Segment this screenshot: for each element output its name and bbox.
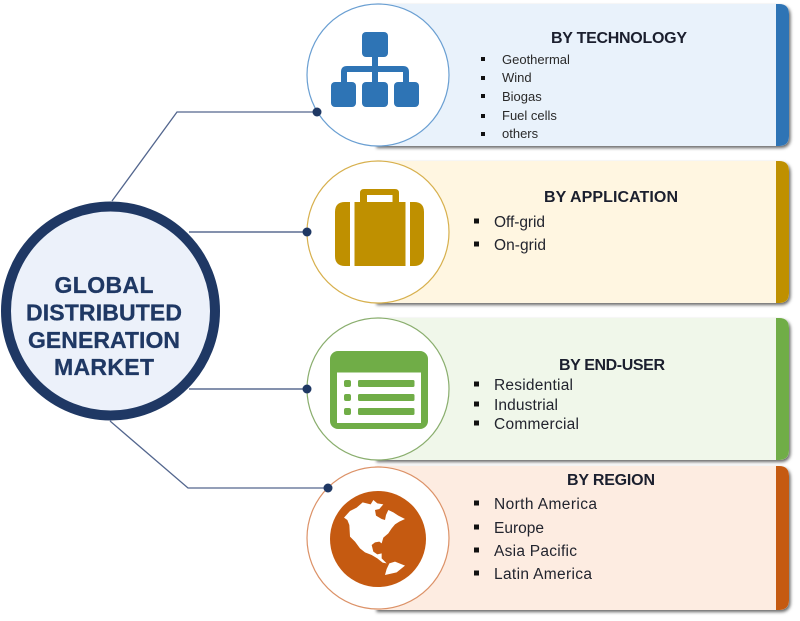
icon: briefcase: [335, 189, 424, 266]
list: end-user types: [474, 377, 579, 433]
panel accent bar: [776, 318, 789, 460]
list: regions: [474, 496, 597, 583]
central circle: market title: MARKET: [54, 354, 154, 380]
connector: to application: [189, 228, 312, 236]
list: end-user types: Residential: [494, 377, 573, 394]
icon circle: [307, 467, 449, 609]
list: technology types: Fuel cells: [502, 108, 557, 123]
icon: globe: [330, 491, 426, 587]
heading: BY END-USER: [559, 357, 665, 374]
icon: hierarchy: [331, 32, 419, 107]
central circle: market title: DISTRIBUTED: [26, 300, 182, 326]
heading: BY APPLICATION: [544, 189, 678, 206]
list: end-user types: Industrial: [494, 397, 558, 414]
list: regions: Asia Pacific: [494, 543, 577, 560]
list: application types: On-grid: [494, 237, 546, 254]
panel: by application: [307, 161, 789, 303]
panel accent bar: [776, 466, 789, 610]
list: technology types: Geothermal: [502, 52, 570, 67]
central circle ring: [6, 206, 215, 416]
panel: by region: [307, 466, 789, 610]
panel: by technology: [307, 4, 789, 146]
icon: table list: [330, 351, 428, 429]
icon circle: [307, 161, 449, 303]
panel background: [375, 161, 789, 303]
list: technology types: Biogas: [502, 89, 542, 104]
list: regions: Latin America: [494, 566, 592, 583]
connector: to technology: [112, 108, 322, 201]
list: technology types: Wind: [502, 70, 532, 85]
heading: BY TECHNOLOGY: [551, 30, 687, 47]
list: end-user types: Commercial: [494, 416, 579, 433]
list: technology types: others: [502, 126, 539, 141]
list: technology types: [481, 52, 570, 141]
central circle: market title: GENERATION: [28, 327, 180, 353]
heading: BY REGION: [567, 472, 655, 489]
panel background: [375, 318, 789, 460]
panel accent bar: [776, 161, 789, 303]
panel background: [375, 4, 789, 146]
panel: by end-user: [307, 318, 789, 460]
title: GLOBAL: [54, 272, 154, 298]
list: application types: Off-grid: [494, 214, 545, 231]
icon circle: [307, 4, 449, 146]
connector: to region: [110, 421, 332, 492]
central circle: market title: [6, 206, 215, 416]
list: application types: [474, 214, 546, 254]
panel background: [375, 466, 789, 610]
list: regions: Europe: [494, 520, 544, 537]
connector: to end-user: [189, 384, 312, 394]
panel accent bar: [776, 4, 789, 146]
list: regions: North America: [494, 496, 597, 513]
icon circle: [307, 318, 449, 460]
